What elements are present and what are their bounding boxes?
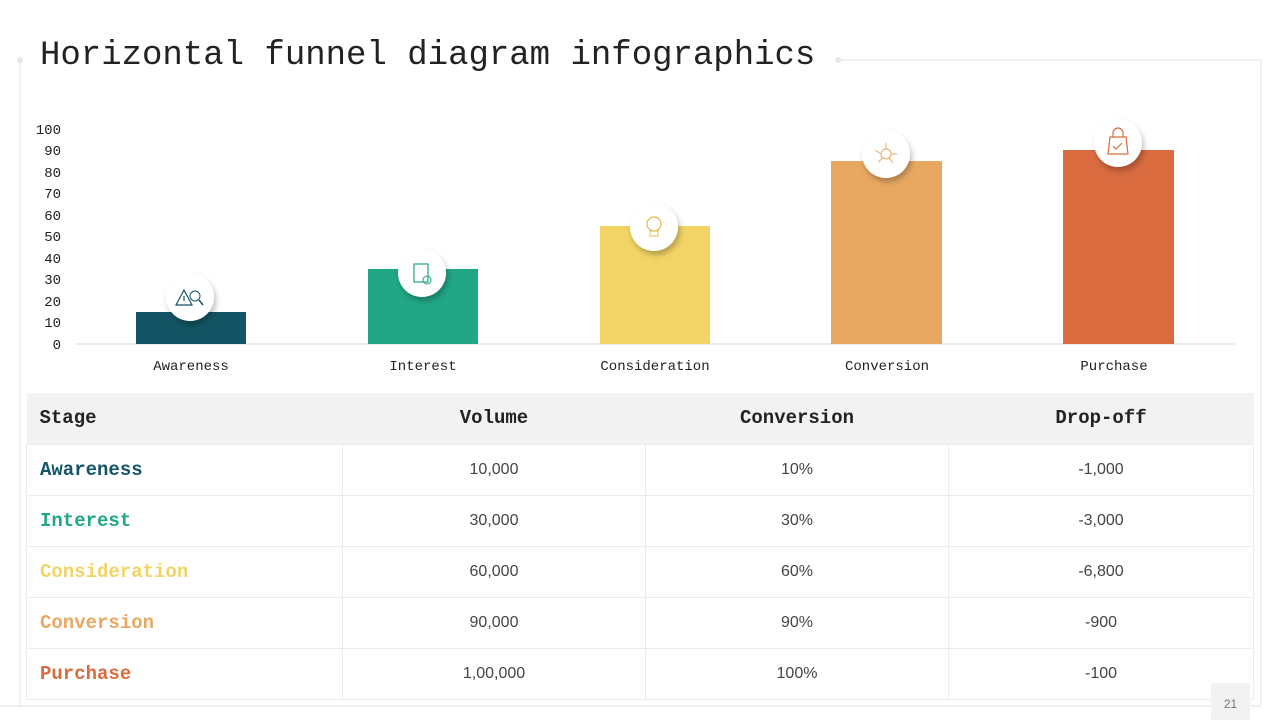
bar: Consideration [600,203,710,344]
table: Awareness [40,458,143,480]
table: 30,000 [470,512,518,528]
y axis labels: 80 [44,166,61,182]
table: 90,000 [470,614,518,630]
table: 60,000 [470,562,518,580]
table: 1,00,000 [463,664,525,682]
table: Consideration [40,560,188,582]
table: Conversion [40,612,154,634]
title: Horizontal funnel diagram infographics [40,37,815,75]
x axis labels: Awareness [153,359,229,375]
table: -3,000 [1078,512,1124,528]
x axis labels: Consideration [600,359,710,375]
table: 10% [781,460,813,478]
page number [1211,683,1250,720]
y axis labels: 0 [53,338,61,354]
y axis labels: 10 [44,316,61,332]
table: Stage [40,407,97,429]
table: -6,800 [1078,562,1124,580]
y axis labels: 30 [44,273,61,289]
y axis labels: 70 [44,187,61,203]
bar: Interest [368,249,478,344]
page number: 21 [1224,697,1237,711]
table: Volume [460,407,528,429]
y axis labels: 90 [44,144,61,160]
y axis labels: 100 [36,123,61,139]
table: Purchase [40,662,131,684]
table: -1,000 [1078,460,1124,478]
bar chart [36,123,1235,375]
y axis labels [36,123,61,354]
table: 100% [777,664,817,682]
table: 90% [781,614,813,630]
table: -900 [1085,614,1117,630]
table: 60% [781,562,813,580]
bar: Purchase [1063,119,1174,344]
y axis labels: 20 [44,295,61,311]
table [26,393,1254,700]
table: Interest [40,510,131,532]
x axis labels: Conversion [845,359,929,375]
bar: Conversion [831,130,942,344]
x axis labels: Interest [389,359,457,375]
table: -100 [1085,664,1117,682]
x axis labels: Purchase [1080,359,1148,375]
bar: Awareness [136,273,246,344]
y axis labels: 60 [44,209,61,225]
table: 30% [781,512,813,528]
table: Drop-off [1055,407,1147,429]
x axis labels [153,359,1148,375]
table: Conversion [740,407,854,429]
y axis labels: 50 [44,230,61,246]
y axis labels: 40 [44,252,61,268]
table: 10,000 [470,460,518,478]
